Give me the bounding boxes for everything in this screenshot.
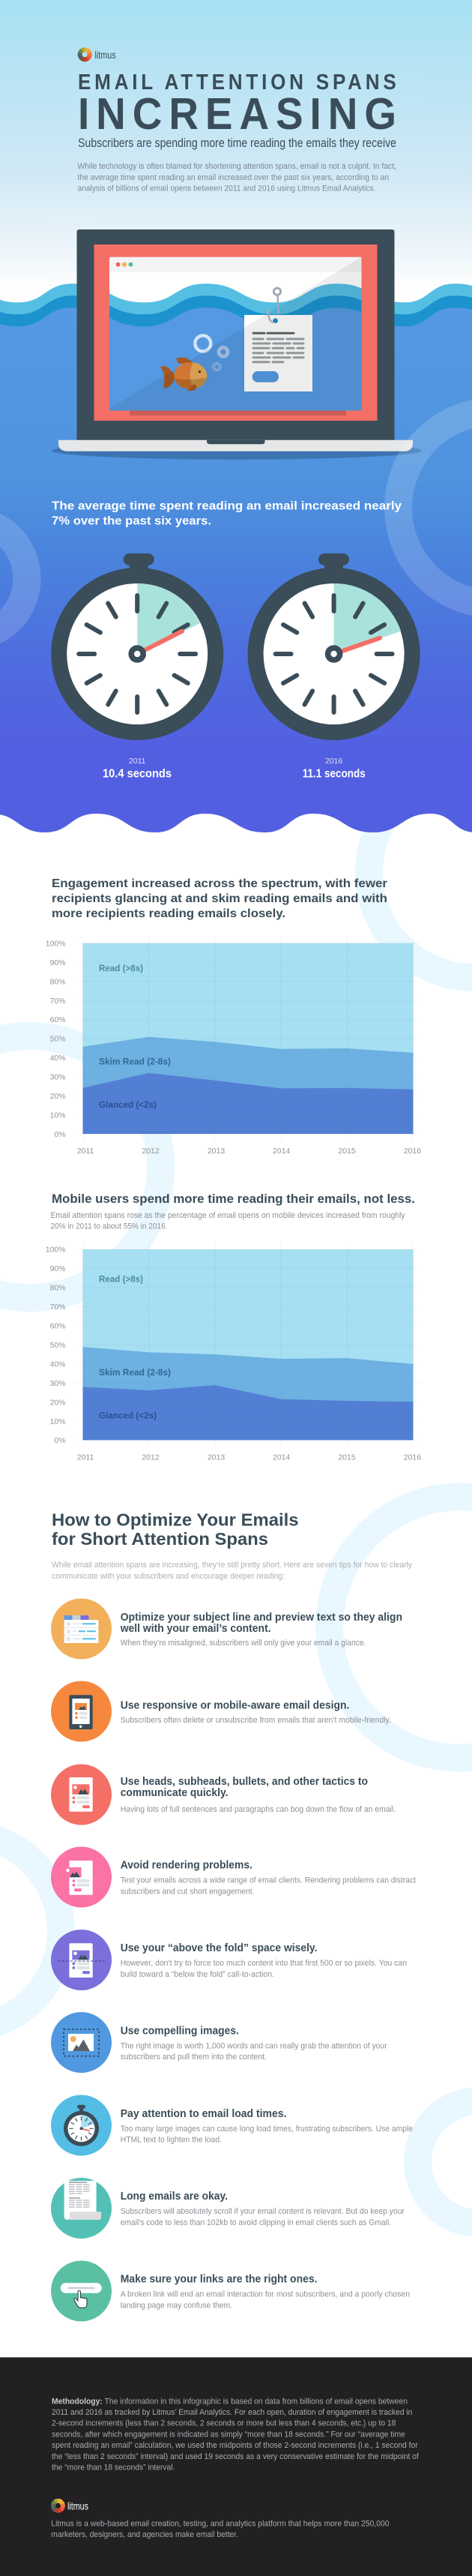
y axis labels: 90% xyxy=(50,1264,66,1273)
x axis labels: 2016 xyxy=(404,1453,421,1462)
tip 4: rendering xyxy=(51,1846,416,1908)
heading: how to optimize: How to Optimize Your Emails xyxy=(52,1510,299,1530)
series labels: Read (>8s) xyxy=(99,1273,143,1284)
icon: link button with cursor xyxy=(51,2260,112,2322)
y axis labels: 60% xyxy=(50,1015,66,1024)
title: INCREASING xyxy=(78,89,396,139)
tip text: subscribers and pull them into the content. xyxy=(121,2053,267,2062)
tip title: Make sure your links are the right ones. xyxy=(121,2274,317,2286)
x axis labels: 2011 xyxy=(77,1147,94,1156)
x axis labels: 2015 xyxy=(338,1453,356,1462)
y axis labels: 50% xyxy=(50,1341,66,1350)
tip text: Subscribers often delete or unsubscribe from emails that aren’t mobile-friendly. xyxy=(121,1716,391,1725)
intro text: analysis of billions of email opens between 2011 and 2016 using Litmus Email Analytics. xyxy=(78,184,376,193)
icon: structured email xyxy=(51,1764,112,1825)
tip text: subscribers and cut short engagement. xyxy=(121,1887,255,1896)
heading: engagement: recipients glancing at and skim reading emails and with xyxy=(52,892,387,905)
tip title: Use your “above the fold” space wisely. xyxy=(121,1942,317,1954)
tip title: Use compelling images. xyxy=(121,2025,239,2037)
tip text xyxy=(121,2041,387,2062)
icon: scroll document xyxy=(51,2178,112,2239)
logo: litmus header xyxy=(78,48,116,61)
x axis labels: 2015 xyxy=(338,1147,356,1156)
x axis labels: 2013 xyxy=(208,1147,225,1156)
tip text: landing page may confuse them. xyxy=(121,2301,232,2310)
area chart: all opens xyxy=(46,936,421,1156)
series labels xyxy=(99,1273,171,1420)
tip text: build toward a “below the fold” call-to-action. xyxy=(121,1970,274,1979)
y axis labels: 10% xyxy=(50,1111,66,1120)
heading: engagement: more recipients reading emails closely. xyxy=(52,907,285,920)
series labels: Skim Read (2-8s) xyxy=(99,1367,171,1378)
about text xyxy=(51,2520,390,2539)
x axis labels xyxy=(77,1453,421,1462)
heading: engagement: Engagement increased across the spectrum, with fewer xyxy=(52,877,387,890)
browser window xyxy=(109,256,361,411)
laptop illustration xyxy=(52,229,422,460)
tip text xyxy=(121,2207,405,2227)
y axis labels: 50% xyxy=(50,1035,66,1044)
heading: average time: The average time spent reading an email increased nearly xyxy=(52,499,402,513)
y axis labels: 100% xyxy=(46,939,66,948)
y axis labels: 60% xyxy=(50,1321,66,1330)
y axis labels xyxy=(46,939,66,1139)
mobile text xyxy=(51,1211,405,1231)
y axis labels: 20% xyxy=(50,1092,66,1101)
icon: tablet xyxy=(51,1681,112,1741)
series labels: Glanced (<2s) xyxy=(99,1099,157,1110)
icon: stopwatch xyxy=(51,2095,112,2155)
tip title: Use heads, subheads, bullets, and other tactics to xyxy=(121,1776,368,1788)
tip title xyxy=(121,1776,368,1799)
background rings: white sections xyxy=(0,766,472,2223)
methodology text: 2-second increments (less than 2 seconds, 2 seconds or more but less than 4 seconds, etc.) up to 18 xyxy=(52,2419,396,2428)
mobile text: Email attention spans rose as the percentage of email opens on mobile devices increased from roughly xyxy=(51,1211,405,1220)
tip title: Use responsive or mobile-aware email design. xyxy=(121,1699,349,1711)
tip text: Having lots of full sentences and paragraphs can bog down the flow of an email. xyxy=(121,1805,396,1814)
mobile text: 20% in 2011 to about 55% in 2016. xyxy=(51,1222,168,1231)
y axis labels: 40% xyxy=(50,1360,66,1369)
stopwatch 2011 xyxy=(51,553,223,740)
tip text: A broken link will end an email interaction for most subscribers, and a poorly chosen xyxy=(121,2290,410,2299)
tip text: Test your emails across a wide range of email clients. Rendering problems can distract xyxy=(121,1876,416,1885)
heading: how to optimize xyxy=(52,1510,299,1549)
tip title: Long emails are okay. xyxy=(121,2191,228,2203)
label: 2016 xyxy=(303,757,366,780)
methodology text: 2011 and 2016 as tracked by Litmus’ Email Analytics. For each open, duration of engagement is tracked in xyxy=(52,2408,412,2417)
tip text: HTML text to lighten the load. xyxy=(121,2136,222,2145)
logo: litmus header: litmus xyxy=(94,49,116,61)
icon: broken layout xyxy=(51,1846,112,1908)
icon: fold line xyxy=(51,1930,112,1990)
tip text xyxy=(121,1876,416,1896)
label: 2016: 2016 xyxy=(325,757,342,766)
icon: framed image xyxy=(51,2012,112,2073)
tip text: When they’re misaligned, subscribers will only give your email a glance. xyxy=(121,1639,366,1648)
optimize intro text xyxy=(52,1561,412,1581)
intro text: While technology is often blamed for shortening attention spans, email is not a culprit. In fact, xyxy=(78,162,396,171)
title: EMAIL ATTENTION SPANS xyxy=(78,70,396,94)
tip text xyxy=(121,2125,413,2145)
x axis labels: 2012 xyxy=(142,1453,160,1462)
heading: engagement xyxy=(52,877,387,920)
x axis labels xyxy=(77,1147,421,1156)
y axis labels: 10% xyxy=(50,1417,66,1426)
intro text: the average time spent reading an email increased over the past six years, according to an xyxy=(78,173,389,182)
tip 7: load times xyxy=(51,2095,413,2155)
x axis labels: 2014 xyxy=(273,1453,291,1462)
y axis labels: 0% xyxy=(54,1130,66,1139)
x axis labels: 2011 xyxy=(77,1453,94,1462)
y axis labels xyxy=(46,1245,66,1445)
icon: inbox list xyxy=(51,1599,112,1659)
bubbles xyxy=(195,336,228,370)
y axis labels: 40% xyxy=(50,1054,66,1063)
email document xyxy=(244,315,312,391)
intro text xyxy=(78,162,396,193)
y axis labels: 70% xyxy=(50,997,66,1006)
tip 2: responsive xyxy=(51,1681,391,1741)
tip text: Too many large images can cause long load times, frustrating subscribers. Use ample xyxy=(121,2125,413,2134)
tip text: The right image is worth 1,000 words and can really grab the attention of your xyxy=(121,2041,387,2050)
tip title: Pay attention to email load times. xyxy=(121,2108,286,2120)
heading: average time xyxy=(52,499,402,528)
tip title: Optimize your subject line and preview text so they align xyxy=(121,1612,402,1624)
y axis labels: 80% xyxy=(50,1284,66,1293)
heading: how to optimize: for Short Attention Spans xyxy=(52,1529,268,1549)
y axis labels: 80% xyxy=(50,978,66,987)
tip title: well with your email’s content. xyxy=(120,1623,271,1635)
label: 2016: 11.1 seconds xyxy=(303,768,366,780)
label: 2011 xyxy=(103,757,172,780)
y axis labels: 20% xyxy=(50,1398,66,1407)
series labels: Read (>8s) xyxy=(99,963,143,973)
panel: footer xyxy=(0,2357,472,2576)
tip 8: long emails xyxy=(51,2178,405,2239)
methodology text xyxy=(52,2397,420,2473)
tip title: communicate quickly. xyxy=(121,1787,228,1799)
tip 6: compelling images xyxy=(51,2012,387,2073)
y axis labels: 30% xyxy=(50,1379,66,1388)
subtitle: Subscribers are spending more time reading the emails they receive xyxy=(78,136,396,150)
y axis labels: 100% xyxy=(46,1245,66,1254)
tip title xyxy=(120,1612,402,1635)
methodology text: Methodology: The information in this infographic is based on data from billions of email opens between xyxy=(52,2397,408,2406)
methodology text: the “more than 18 seconds” interval. xyxy=(52,2464,175,2473)
x axis labels: 2016 xyxy=(404,1147,421,1156)
about text: Litmus is a web-based email creation, testing, and analytics platform that helps more than 250,000 xyxy=(51,2520,390,2529)
methodology text: seconds, after which engagement is indicated as simply “more than 18 seconds.” For our “average time xyxy=(52,2430,405,2439)
tip text xyxy=(121,1959,407,1979)
y axis labels: 90% xyxy=(50,958,66,967)
deep water panel with bottom wave xyxy=(0,307,472,832)
y axis labels: 70% xyxy=(50,1303,66,1312)
goldfish xyxy=(160,357,207,391)
label: 2011: 2011 xyxy=(129,757,146,766)
tip 9: links xyxy=(51,2260,410,2322)
stopwatch 2016 xyxy=(248,553,420,740)
methodology text: spent reading an email” calculation, we used the midpoints of those 2-second increments (i.e., 1 second for xyxy=(52,2441,418,2450)
y axis labels: 0% xyxy=(54,1436,66,1445)
tip 1: subject line xyxy=(51,1599,402,1659)
sky background xyxy=(0,0,472,304)
area chart: mobile opens xyxy=(46,1243,421,1462)
series labels: Skim Read (2-8s) xyxy=(99,1056,171,1066)
tip text: However, don’t try to force too much content into that first 500 or so pixels. You can xyxy=(121,1959,407,1968)
tip text: email’s code to less than 102kb to avoid clipping in email clients such as Gmail. xyxy=(121,2218,391,2227)
series labels: Glanced (<2s) xyxy=(99,1410,157,1420)
methodology text: the “less than 2 seconds” interval) and used 19 seconds as a very conservative estimate for the midpoint of xyxy=(52,2452,420,2461)
tip text xyxy=(121,2290,410,2310)
about text: marketers, designers, and agencies make email better. xyxy=(51,2530,238,2539)
x axis labels: 2013 xyxy=(208,1453,225,1462)
optimize intro text: communicate with your subscribers and encourage deeper reading: xyxy=(52,1572,285,1581)
heading: average time: 7% over the past six years. xyxy=(52,514,211,528)
logo: litmus footer xyxy=(51,2499,88,2512)
x axis labels: 2014 xyxy=(273,1147,291,1156)
tip 3: heads and bullets xyxy=(51,1764,396,1825)
heading: mobile users: Mobile users spend more time reading their emails, not less. xyxy=(52,1192,415,1206)
label: 2011: 10.4 seconds xyxy=(103,768,172,780)
x axis labels: 2012 xyxy=(142,1147,160,1156)
water waves: top xyxy=(0,283,472,537)
tip text: Subscribers will absolutely scroll if your email content is relevant. But do keep your xyxy=(121,2207,405,2216)
decorative rings on blue panel xyxy=(0,411,472,637)
y axis labels: 30% xyxy=(50,1072,66,1081)
fish hook xyxy=(268,288,281,323)
optimize intro text: While email attention spans are increasing, they're still pretty short. Here are seven tips for how to clearly xyxy=(52,1561,412,1570)
tip 5: above the fold xyxy=(51,1930,407,1990)
series labels xyxy=(99,963,171,1110)
logo: litmus footer: litmus xyxy=(67,2500,88,2512)
tip title: Avoid rendering problems. xyxy=(121,1860,252,1872)
